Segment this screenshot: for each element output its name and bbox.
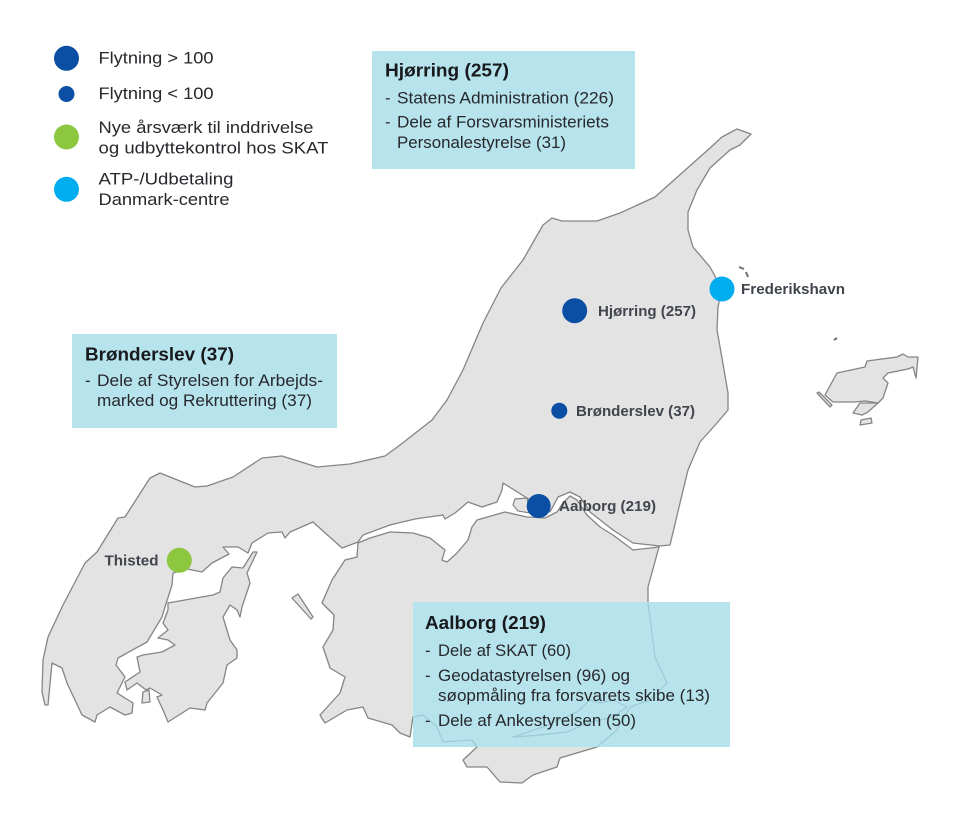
text block: Aalborg list (425, 641, 710, 730)
marker: Frederikshavn (710, 276, 845, 302)
legend item: Nye årsværk: Nye årsværk til inddrivelse (98, 118, 314, 137)
panel: Aalborg (410, 602, 730, 760)
text block: Hjørring list: Statens Administration (226) (397, 88, 614, 108)
text block: Aalborg list: Dele af Ankestyrelsen (50) (438, 711, 636, 730)
text block: Brønderslev list (85, 371, 323, 410)
text block: Aalborg list: - (425, 666, 431, 685)
map region: Himmerland (320, 496, 667, 783)
map outline seen through the panel (410, 603, 667, 760)
map: Nordjylland (42, 129, 918, 783)
text block: Aalborg list: Geodatastyrelsen (96) og (438, 666, 630, 685)
map region: Læsø spit (817, 392, 832, 407)
marker: Aalborg (527, 494, 656, 518)
legend item: Flytning over 100: Flytning > 100 (98, 48, 214, 68)
legend item: ATP-/Udbetaling Danmark-centre (54, 170, 234, 209)
legend item: ATP-/Udbetaling Danmark-centre: ATP-/Udbetaling (98, 170, 234, 188)
marker: Thisted: Thisted (104, 552, 158, 570)
text block: Aalborg list: Dele af SKAT (60) (438, 641, 571, 660)
text block: Hjørring list: Dele af Forsvarsministeriets (397, 112, 609, 132)
legend item: Flytning over 100 (54, 46, 214, 71)
map inlet: Aalborg harbour (513, 498, 530, 513)
text block: Aalborg list: søopmåling fra forsvarets skibe (13) (438, 686, 710, 705)
text block: Brønderslev list: - (85, 371, 91, 390)
text block: Hjørring list: Personalestyrelse (31) (397, 133, 566, 152)
marker: Thisted (104, 548, 192, 573)
marker: Hjørring: Hjørring (257) (598, 303, 696, 320)
map region: Læsø (825, 354, 918, 403)
panel: Hjørring (372, 51, 635, 169)
legend (54, 46, 328, 209)
text block: Aalborg list: - (425, 641, 431, 660)
marker: Frederikshavn: Frederikshavn (741, 281, 845, 298)
map region: islet in Limfjord (142, 690, 150, 703)
marker: Hjørring (562, 298, 696, 323)
heading: Brønderslev: Brønderslev (37) (85, 344, 234, 364)
map region: Vendsyssel and Thy (42, 129, 751, 722)
text block: Aalborg list: - (425, 711, 431, 730)
map region: Læsø south islet (853, 403, 878, 415)
legend item: Flytning under 100: Flytning < 100 (98, 84, 214, 103)
legend item: Nye årsværk: og udbyttekontrol hos SKAT (98, 138, 328, 158)
text block: Hjørring list: - (385, 88, 391, 108)
text block: Brønderslev list: Dele af Styrelsen for Arbejds- (97, 371, 323, 390)
map region: Mors (125, 552, 257, 722)
map region: Hirsholmene islets (739, 267, 837, 340)
legend item: Flytning under 100 (58, 84, 214, 103)
panel: Brønderslev (72, 334, 337, 428)
heading: Aalborg: Aalborg (219) (425, 612, 546, 633)
map region: Læsø small islet (860, 418, 872, 425)
heading: Hjørring: Hjørring (257) (385, 60, 509, 80)
map region: Livø (292, 594, 313, 619)
text block: Brønderslev list: marked og Rekruttering (37) (97, 391, 312, 410)
marker: Brønderslev: Brønderslev (37) (576, 403, 695, 420)
text block: Hjørring list: - (385, 112, 391, 132)
legend item: Nye årsværk (54, 118, 328, 158)
marker: Aalborg: Aalborg (219) (559, 498, 656, 515)
text block: Hjørring list (385, 88, 614, 152)
legend item: ATP-/Udbetaling Danmark-centre: Danmark-centre (98, 190, 230, 209)
